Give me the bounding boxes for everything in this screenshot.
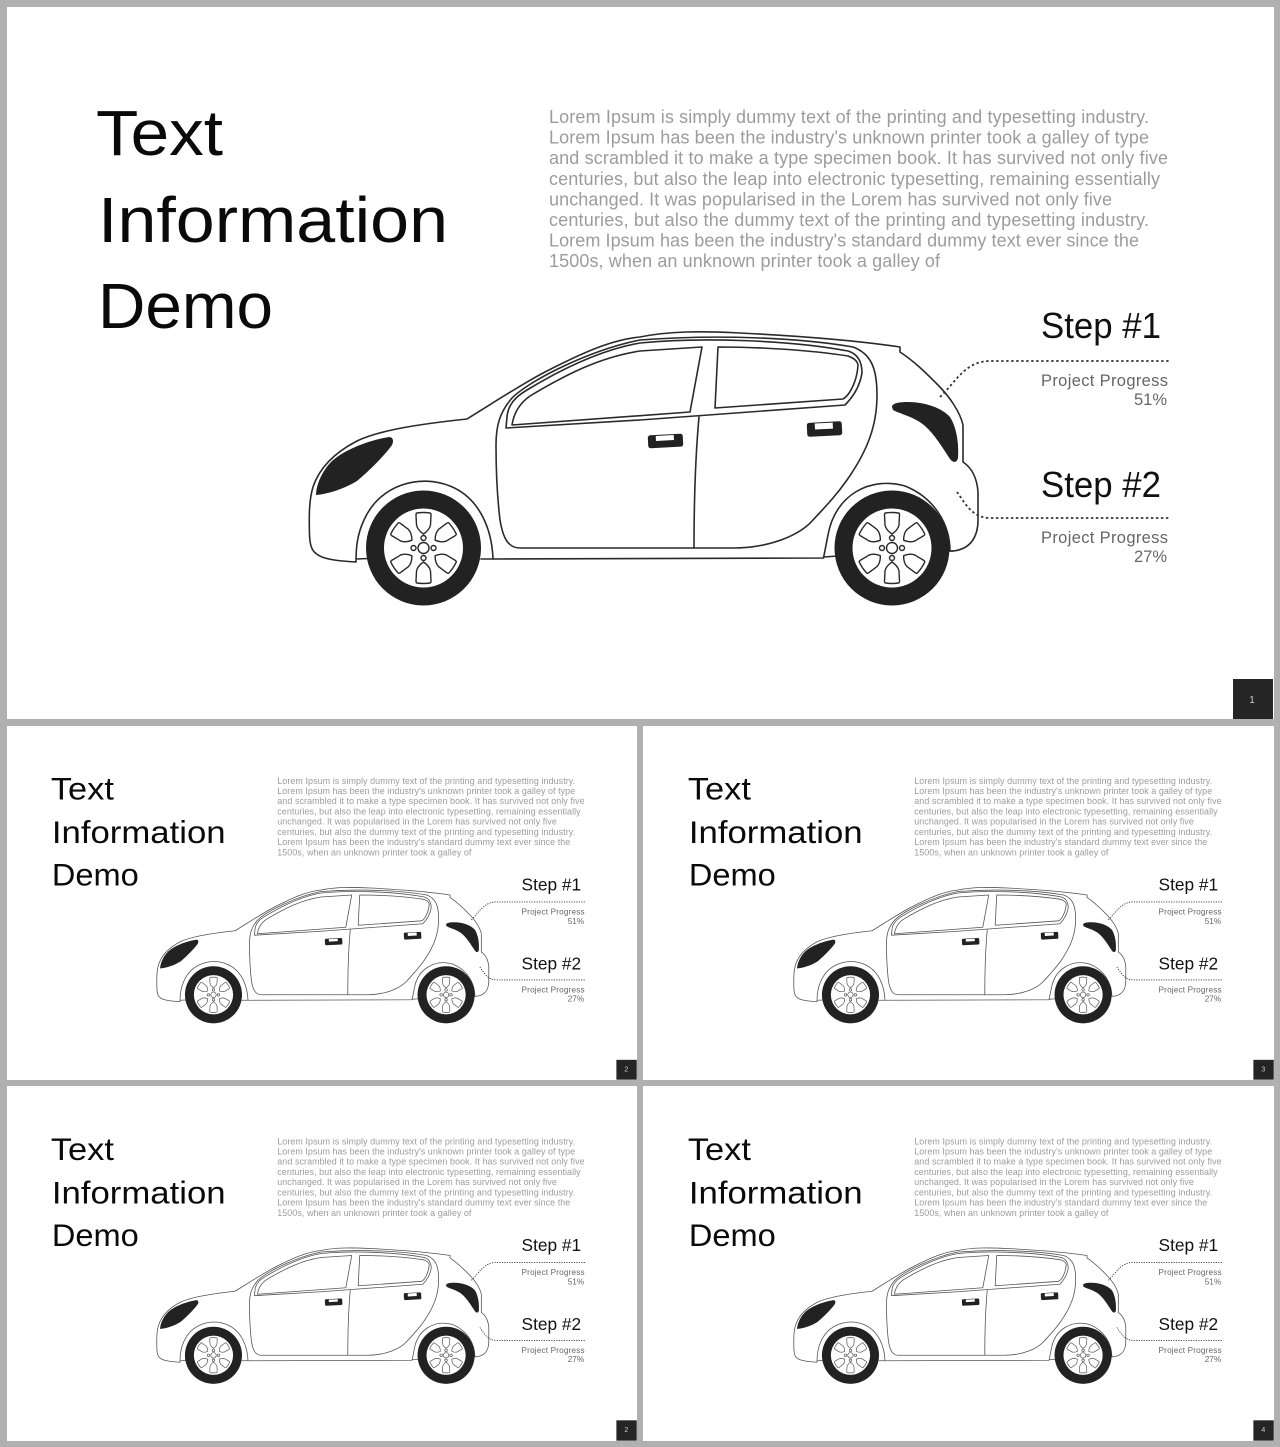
body text: and scrambled it to make a type specimen book. It has survived not only five xyxy=(549,148,1168,168)
step 2 label xyxy=(522,953,585,1004)
step 2 label: 27% xyxy=(568,1355,584,1364)
leader line 2 xyxy=(480,967,585,980)
step 1 label: Project Progress xyxy=(1159,1268,1222,1277)
body text: unchanged. It was popularised in the Lorem has survived not only five xyxy=(914,1177,1194,1187)
body text: 1500s, when an unknown printer took a galley of xyxy=(277,1208,472,1218)
body text: centuries, but also the dummy text of the printing and typesetting industry. xyxy=(914,827,1212,837)
body text: and scrambled it to make a type specimen book. It has survived not only five xyxy=(277,796,585,806)
body text: Lorem Ipsum has been the industry's unknown printer took a galley of type xyxy=(914,786,1212,796)
body text xyxy=(914,1136,1222,1218)
page number: 2 xyxy=(624,1067,628,1074)
body text: unchanged. It was popularised in the Lorem has survived not only five xyxy=(549,190,1112,210)
step 2 label: Step #2 xyxy=(522,1314,581,1334)
page number xyxy=(616,1060,637,1080)
slide 3 background xyxy=(643,726,1274,1080)
step 1 label xyxy=(1159,1235,1222,1286)
title: Information xyxy=(689,814,863,850)
headlight xyxy=(316,437,393,495)
front wheel xyxy=(366,490,481,606)
title: Text xyxy=(51,771,114,807)
title: Demo xyxy=(52,1217,139,1253)
body text: Lorem Ipsum has been the industry's standard dummy text ever since the xyxy=(277,1198,570,1208)
body text: centuries, but also the leap into electronic typesetting, remaining essentially xyxy=(549,169,1160,189)
car illustration xyxy=(157,1248,489,1384)
title: Demo xyxy=(52,857,139,893)
body text: centuries, but also the dummy text of the printing and typesetting industry. xyxy=(277,1187,575,1197)
step 2 label: Project Progress xyxy=(1159,985,1222,994)
body text: Lorem Ipsum has been the industry's standard dummy text ever since the xyxy=(549,230,1139,250)
body text: Lorem Ipsum is simply dummy text of the printing and typesetting industry. xyxy=(914,1136,1212,1146)
car illustration xyxy=(157,887,489,1023)
door divider xyxy=(694,417,699,548)
body text: Lorem Ipsum is simply dummy text of the printing and typesetting industry. xyxy=(549,107,1149,127)
step 1 label xyxy=(1041,305,1168,409)
step 2 label: Project Progress xyxy=(1041,529,1168,547)
window frame xyxy=(506,340,862,428)
body text: Lorem Ipsum has been the industry's unknown printer took a galley of type xyxy=(914,1146,1212,1156)
title xyxy=(688,1131,863,1253)
body text: Lorem Ipsum has been the industry's unknown printer took a galley of type xyxy=(277,1146,575,1156)
body text: Lorem Ipsum has been the industry's standard dummy text ever since the xyxy=(277,837,570,847)
step 1 label: 51% xyxy=(568,1277,584,1286)
page number xyxy=(1253,1420,1274,1441)
body text: Lorem Ipsum has been the industry's unknown printer took a galley of type xyxy=(549,128,1149,148)
body text xyxy=(549,107,1168,271)
body text: Lorem Ipsum is simply dummy text of the printing and typesetting industry. xyxy=(277,776,575,786)
step 2 label xyxy=(1159,953,1222,1004)
step 2 label: Project Progress xyxy=(1159,1346,1222,1355)
body text: centuries, but also the leap into electronic typesetting, remaining essentially xyxy=(277,807,581,817)
step 2 label: Step #2 xyxy=(1159,1314,1218,1334)
step 1 label: Step #1 xyxy=(522,875,581,895)
step 1 label xyxy=(522,1235,585,1286)
panel: slide 5 xyxy=(688,1131,1274,1441)
step 2 label: Step #2 xyxy=(1159,953,1218,973)
body text: centuries, but also the dummy text of the printing and typesetting industry. xyxy=(277,827,575,837)
leader line 1 xyxy=(471,902,585,920)
step 1 label: Project Progress xyxy=(522,907,585,916)
title: Text xyxy=(51,1131,114,1167)
title: Demo xyxy=(689,1217,776,1253)
step 1 label: Project Progress xyxy=(522,1268,585,1277)
body text: unchanged. It was popularised in the Lorem has survived not only five xyxy=(277,817,557,827)
tail light xyxy=(892,402,958,462)
page number xyxy=(616,1420,637,1441)
body text: and scrambled it to make a type specimen book. It has survived not only five xyxy=(277,1157,585,1167)
body text xyxy=(277,1136,585,1218)
leader line 1 xyxy=(1108,1262,1222,1280)
body text: centuries, but also the leap into electronic typesetting, remaining essentially xyxy=(277,1167,581,1177)
panel: slide 2 xyxy=(51,771,637,1080)
car illustration xyxy=(309,332,978,606)
leader line 1 xyxy=(471,1262,585,1280)
step 2 label: 27% xyxy=(1205,1355,1221,1364)
step 1 label: Step #1 xyxy=(1041,305,1161,346)
wheel arch stub lines xyxy=(357,551,953,559)
step 2 label: Step #2 xyxy=(1041,464,1161,505)
step 1 label: Project Progress xyxy=(1159,907,1222,916)
door outline xyxy=(496,337,877,548)
title: Information xyxy=(689,1174,863,1210)
body text: Lorem Ipsum has been the industry's standard dummy text ever since the xyxy=(914,1198,1207,1208)
step 1 label: 51% xyxy=(1205,917,1221,926)
panel: slide 1 xyxy=(96,97,1273,719)
leader line 1 xyxy=(940,361,1169,397)
body text: centuries, but also the leap into electronic typesetting, remaining essentially xyxy=(914,1167,1218,1177)
car illustration xyxy=(794,1248,1126,1384)
rear wheel xyxy=(834,490,950,606)
body text: unchanged. It was popularised in the Lorem has survived not only five xyxy=(914,817,1194,827)
page number: 1 xyxy=(1249,695,1255,706)
page number xyxy=(1233,679,1273,719)
step 2 label xyxy=(1041,464,1168,566)
step 1 label: Project Progress xyxy=(1041,372,1168,390)
title: Information xyxy=(98,184,448,256)
step 1 label xyxy=(522,875,585,926)
title xyxy=(688,771,863,893)
front window xyxy=(512,347,702,425)
page number: 2 xyxy=(624,1427,628,1434)
step 2 label: 27% xyxy=(568,995,584,1004)
title: Demo xyxy=(689,857,776,893)
title: Text xyxy=(96,97,223,169)
leader line 1 xyxy=(1108,902,1222,920)
title: Information xyxy=(52,1174,226,1210)
slide 1 background xyxy=(7,7,1274,719)
panel: slide 4 xyxy=(51,1131,637,1441)
step 1 label: Step #1 xyxy=(522,1235,581,1255)
step 2 label xyxy=(522,1314,585,1364)
step 1 label: 51% xyxy=(568,917,584,926)
step 1 label xyxy=(1159,875,1222,926)
leader line 2 xyxy=(1117,1327,1222,1340)
body text: and scrambled it to make a type specimen book. It has survived not only five xyxy=(914,1157,1222,1167)
title xyxy=(51,1131,226,1253)
step 1 label: 51% xyxy=(1205,1277,1221,1286)
leader line 2 xyxy=(957,492,1169,518)
title: Text xyxy=(688,771,751,807)
body text xyxy=(914,776,1222,857)
slide 5 background xyxy=(643,1086,1274,1441)
body text: centuries, but also the dummy text of the printing and typesetting industry. xyxy=(914,1187,1212,1197)
body text: 1500s, when an unknown printer took a galley of xyxy=(914,847,1109,857)
body text: and scrambled it to make a type specimen book. It has survived not only five xyxy=(914,796,1222,806)
step 2 label: 27% xyxy=(1134,548,1167,566)
body text: 1500s, when an unknown printer took a galley of xyxy=(549,251,941,271)
page number: 3 xyxy=(1261,1067,1265,1074)
body text: centuries, but also the leap into electronic typesetting, remaining essentially xyxy=(914,807,1218,817)
page number xyxy=(1253,1060,1274,1080)
slide 4 background xyxy=(7,1086,637,1441)
step 1 label: Step #1 xyxy=(1159,875,1218,895)
title xyxy=(51,771,226,893)
page number: 4 xyxy=(1261,1427,1265,1434)
panel: slide 3 xyxy=(688,771,1274,1080)
step 2 label: Project Progress xyxy=(522,1346,585,1355)
step 2 label: 27% xyxy=(1205,995,1221,1004)
car body outline xyxy=(309,332,978,562)
step 1 label: 51% xyxy=(1134,391,1167,409)
body text: Lorem Ipsum is simply dummy text of the printing and typesetting industry. xyxy=(277,1136,575,1146)
body text: Lorem Ipsum is simply dummy text of the printing and typesetting industry. xyxy=(914,776,1212,786)
body text xyxy=(277,776,585,857)
body text: 1500s, when an unknown printer took a galley of xyxy=(277,847,472,857)
step 2 label: Step #2 xyxy=(522,953,581,973)
step 2 label xyxy=(1159,1314,1222,1364)
title: Text xyxy=(688,1131,751,1167)
slide 2 background xyxy=(7,726,637,1080)
car illustration xyxy=(794,887,1126,1023)
leader line 2 xyxy=(480,1327,585,1340)
body text: unchanged. It was popularised in the Lorem has survived not only five xyxy=(277,1177,557,1187)
step 2 label: Project Progress xyxy=(522,985,585,994)
leader line 2 xyxy=(1117,967,1222,980)
body text: Lorem Ipsum has been the industry's standard dummy text ever since the xyxy=(914,837,1207,847)
body text: 1500s, when an unknown printer took a galley of xyxy=(914,1208,1109,1218)
door handles xyxy=(648,421,842,448)
title xyxy=(96,97,448,342)
title: Demo xyxy=(98,270,273,342)
step 1 label: Step #1 xyxy=(1159,1235,1218,1255)
body text: centuries, but also the dummy text of the printing and typesetting industry. xyxy=(549,210,1149,230)
body text: Lorem Ipsum has been the industry's unknown printer took a galley of type xyxy=(277,786,575,796)
rear window xyxy=(715,347,858,408)
title: Information xyxy=(52,814,226,850)
